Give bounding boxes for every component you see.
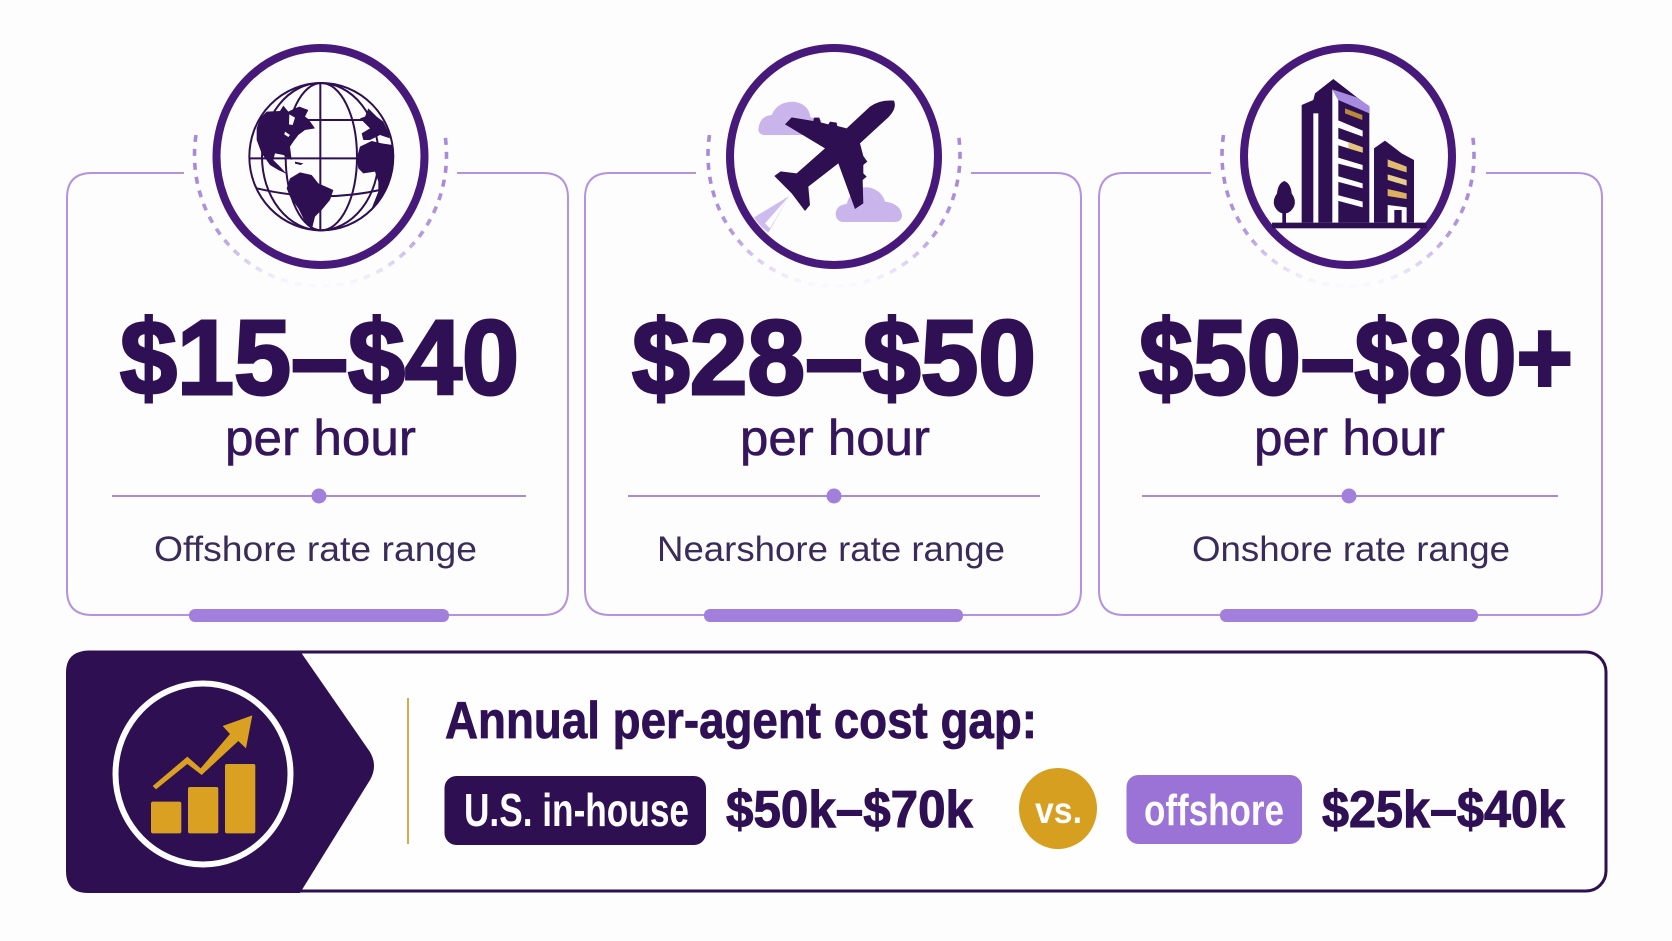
panel: offshore card (67, 48, 568, 622)
icon: buildings (1244, 48, 1452, 265)
dashed arc (1222, 135, 1474, 286)
accent bar (1220, 609, 1478, 622)
price: $28–$50 (632, 299, 1036, 417)
card outline (67, 173, 568, 615)
vs badge (1019, 768, 1097, 849)
icon: growth chart (116, 684, 290, 864)
panel: onshore card (1099, 48, 1602, 622)
gold divider (407, 698, 409, 844)
divider (112, 488, 526, 504)
tree (1274, 181, 1295, 224)
pill: offshore (1126, 775, 1302, 844)
icon: plane (730, 48, 938, 265)
unit: per hour (1254, 410, 1445, 466)
unit: per hour (225, 410, 416, 466)
pill: U.S. in-house: U.S. in-house (464, 784, 689, 836)
label: Nearshore rate range (657, 530, 1005, 569)
price: $50–$80+ (1139, 299, 1573, 417)
dark arrow tab (66, 651, 374, 893)
icon: globe (216, 48, 424, 265)
card outline (585, 173, 1081, 615)
banner outline (68, 652, 1606, 891)
price: $15–$40 (120, 299, 519, 417)
U.S. amount: $50k–$70k (726, 781, 973, 839)
pill: U.S. in-house (444, 776, 706, 845)
offshore amount: $25k–$40k (1322, 781, 1565, 839)
label: Onshore rate range (1192, 530, 1510, 569)
pill: offshore: offshore (1144, 786, 1284, 835)
divider (628, 488, 1040, 504)
panel: nearshore card (585, 48, 1081, 622)
card outline (1099, 173, 1602, 615)
accent bar (704, 609, 963, 622)
panel: annual cost gap banner (66, 651, 1606, 893)
dashed arc (708, 135, 960, 286)
heading: Annual per-agent cost gap: (445, 692, 1037, 750)
label: Offshore rate range (154, 530, 477, 569)
accent bar (189, 609, 449, 622)
vs badge: vs. (1035, 790, 1082, 831)
unit: per hour (740, 410, 930, 466)
dashed arc (194, 135, 446, 286)
divider (1142, 488, 1558, 504)
